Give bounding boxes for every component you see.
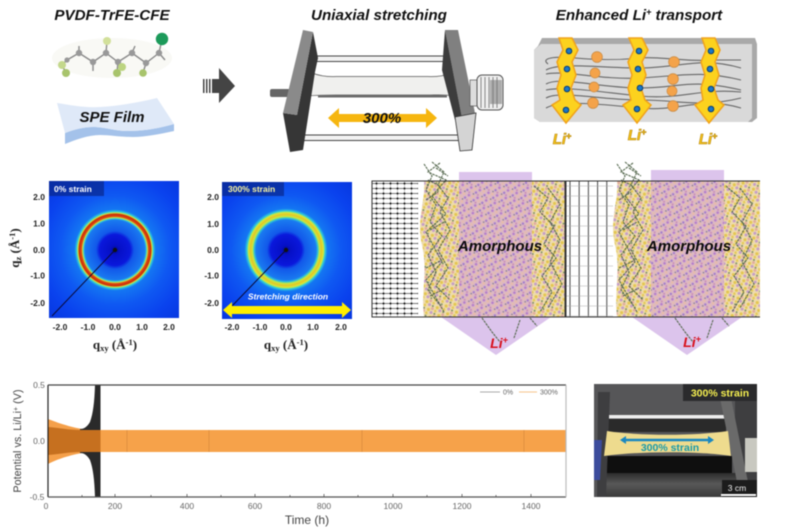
arrow: strain (620, 436, 714, 444)
x tick labels: 1.0 (136, 322, 148, 332)
yellow film (604, 431, 731, 456)
arrow: process step (203, 68, 235, 103)
y tick labels: 1.0 (207, 219, 219, 229)
interface region (420, 181, 565, 317)
axis label: qxy: -1 (126, 337, 133, 347)
rails (300, 56, 462, 140)
legend: 300% (540, 390, 558, 396)
label: 300% strain: 300% strain (228, 184, 275, 194)
x tick labels: 0.0 (109, 322, 121, 332)
y tick labels: -2.0 (30, 298, 45, 308)
x tick labels: 1.0 (307, 322, 319, 332)
y tick labels (204, 192, 219, 308)
diagram: enhanced Li+ transport (534, 38, 757, 148)
heat map (49, 181, 179, 318)
x tick labels: 2.0 (335, 322, 347, 332)
left screw (270, 89, 290, 97)
legend (480, 390, 558, 396)
axis label: qxy: xy (100, 343, 109, 353)
Li+ channel arrows (552, 38, 724, 123)
label: SPE Film: SPE Film (79, 109, 145, 126)
y tick labels (30, 192, 45, 308)
axis label: qz: z (13, 256, 23, 260)
y tick labels: -1.0 (30, 270, 45, 280)
x tick labels: 600 (248, 501, 262, 511)
arrow: stretching direction (223, 302, 351, 318)
x tick labels: 0.0 (280, 322, 292, 332)
x tick labels (225, 322, 347, 332)
panel: molecular simulation unstretched (372, 162, 565, 355)
arrow: 300 percent stretch (328, 108, 437, 128)
label: 0% strain: 0% strain (54, 184, 92, 194)
heading: Enhanced Li+ transport: Enhanced Li (556, 7, 646, 24)
axis label: qxy: -1 (297, 337, 304, 347)
axis label: qxy: ) (304, 337, 308, 352)
label: Li+: + (503, 335, 509, 345)
y tick labels: 2.0 (33, 192, 45, 202)
axis label: qxy: (Å (280, 337, 297, 352)
orange transient (48, 419, 82, 464)
blue Li+ ions (563, 48, 714, 113)
labels: Li+: + (712, 131, 718, 141)
polymer chains (617, 162, 754, 342)
x tick labels: -1.0 (253, 322, 268, 332)
heading: Uniaxial stretching: Uniaxial stretching (311, 7, 448, 24)
label: 300%: 300% (363, 110, 401, 127)
amorphous region (651, 181, 724, 317)
axis label: qz: q (7, 260, 22, 268)
y tick labels: -2.0 (204, 298, 219, 308)
frame (566, 181, 760, 317)
x tick labels: -2.0 (53, 322, 68, 332)
interface region (613, 181, 760, 317)
x tick labels: 0 (44, 501, 49, 511)
axis label: potential: + (13, 407, 20, 411)
x tick labels: 1000 (384, 501, 403, 511)
x tick labels (53, 322, 175, 332)
dark band behind film (608, 419, 726, 432)
x tick labels: 1200 (453, 501, 472, 511)
legend: 0% (503, 390, 513, 396)
axes (48, 385, 566, 497)
x tick labels: 400 (180, 501, 194, 511)
panel: molecular simulation stretched (566, 162, 760, 355)
labels: Li+: Li (699, 131, 712, 148)
x tick labels: 2.0 (163, 322, 175, 332)
y tick labels: 0.0 (33, 245, 45, 255)
y tick labels: 0.0 (207, 245, 219, 255)
scale bar: 3 cm: 3 cm (728, 483, 746, 493)
icon: uniaxial stretching rig (270, 30, 503, 152)
icon: polymer molecule (52, 33, 172, 78)
x tick labels: -1.0 (81, 322, 96, 332)
y tick labels: 2.0 (207, 192, 219, 202)
black trace (80, 385, 100, 497)
axis label: qz: ) (7, 228, 22, 233)
axis label: qxy: (Å (109, 337, 126, 352)
label: Li+: + (696, 334, 702, 344)
y tick labels: -0.5 (30, 492, 45, 502)
orange ions (588, 52, 679, 111)
Li+ pathway arrow (632, 170, 742, 355)
heat map (222, 182, 352, 319)
heading: PVDF-TrFE-CFE: PVDF-TrFE-CFE (54, 7, 171, 24)
y tick labels (30, 380, 45, 502)
label: Amorphous: Amorphous (646, 238, 731, 255)
labels: Li+: Li (628, 127, 641, 144)
lower dark band (604, 456, 732, 473)
crystalline lattice (372, 181, 418, 317)
photo: stretched film in rig (594, 384, 757, 497)
rail (608, 415, 725, 418)
stretched film (307, 73, 452, 96)
clamps (597, 392, 610, 497)
x tick labels: 1400 (522, 501, 541, 511)
icon: SPE film sheet (57, 98, 174, 144)
band marks (127, 430, 524, 452)
axis label: time: Time (h) (285, 513, 329, 527)
label: stretching direction: Stretching direction (248, 292, 328, 302)
left plate (283, 30, 318, 152)
chart: GIWAXS 300% strain (204, 182, 352, 353)
y tick labels: 0.5 (33, 380, 45, 390)
backdrop (594, 384, 757, 497)
x tick labels (44, 501, 541, 511)
y tick labels: 1.0 (33, 218, 45, 228)
heading: Enhanced Li+ transport: + (646, 7, 652, 17)
polymer chains (424, 162, 562, 342)
film slab (534, 38, 757, 122)
axis label: qxy: ) (133, 337, 137, 352)
labels: Li+: + (641, 127, 647, 137)
axis label: potential: Potential vs. Li/Li (12, 411, 24, 493)
chart: GIWAXS 0% strain (7, 181, 179, 353)
y tick labels: -1.0 (204, 270, 219, 280)
scale bar: 3 cm (721, 480, 757, 497)
polymer chains (546, 57, 741, 109)
overlap region (48, 427, 100, 455)
orange 300% trace (100, 430, 566, 452)
knob (470, 75, 503, 110)
y tick labels: 0.0 (33, 436, 45, 446)
x tick labels: -2.0 (225, 322, 240, 332)
axis label: qxy: xy (271, 343, 280, 353)
axis label: qz: (Å (7, 239, 22, 257)
axis label: qxy: q (93, 337, 100, 352)
x tick labels: 200 (108, 501, 122, 511)
label box: 300% strain: 300% strain (691, 388, 749, 400)
labels: Li+: + (566, 131, 572, 141)
labels: Li+ (553, 127, 718, 148)
heading: Enhanced Li+ transport: transport (651, 7, 723, 24)
label: film strain: 300% strain (641, 442, 699, 454)
frame (372, 181, 565, 317)
labels: Li+: Li (553, 131, 566, 148)
axis label: qxy: q (264, 337, 271, 352)
label: Li+: Li (490, 335, 503, 351)
amorphous region (459, 181, 532, 317)
chart: potential vs time (12, 380, 566, 527)
label: Amorphous: Amorphous (457, 238, 542, 255)
axis label: qz: -1 (7, 233, 17, 240)
crystalline lattice (566, 181, 613, 317)
label: Li+: Li (683, 334, 696, 350)
x tick labels: 800 (317, 501, 331, 511)
axis label: potential: (V) (12, 389, 24, 407)
label box: 300% strain (683, 384, 757, 401)
right plate (442, 30, 476, 151)
Li+ pathway arrow (441, 172, 551, 355)
